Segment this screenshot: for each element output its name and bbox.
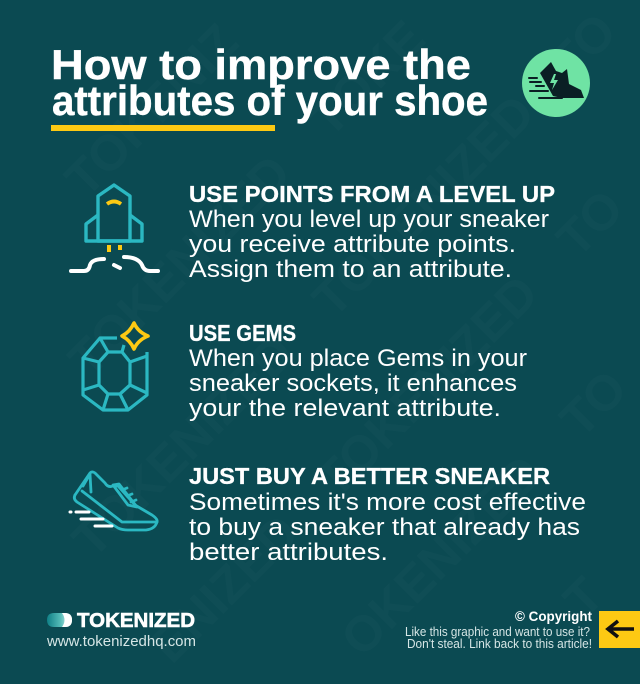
logo: tokenized: TOKENIZED — [77, 610, 195, 632]
section: use gems: USE GEMS — [189, 320, 296, 346]
infographic canvas: TOKENIZED — [62, 325, 305, 568]
icon: sneaker — [70, 472, 157, 530]
section: use gems: your the relevant attribute. — [189, 395, 501, 422]
section: just buy a better sneaker: to buy a sneaker that already has — [189, 514, 580, 541]
infographic canvas: T — [553, 567, 614, 628]
section: use points from a level up: When you level up your sneaker — [189, 206, 549, 233]
section: use points from a level up: you receive attribute points. — [189, 231, 516, 258]
infographic canvas: TOKENIZED — [58, 144, 301, 387]
section: use points from a level up — [189, 181, 555, 283]
arrow button — [599, 611, 640, 648]
infographic canvas: TOKENIZED — [305, 264, 549, 508]
copyright notice: © Copyright — [515, 608, 592, 624]
section: use gems — [189, 320, 527, 422]
infographic canvas: TO — [546, 179, 634, 267]
icon: running shoe badge — [522, 49, 590, 117]
infographic canvas: TOKENIZ — [54, 13, 249, 207]
icon: rocket — [71, 185, 158, 271]
section: use points from a level up: Assign them to an attribute. — [189, 256, 512, 283]
title — [51, 41, 488, 124]
copyright notice: Like this graphic and want to use it? — [405, 624, 590, 639]
section: use points from a level up: USE POINTS FROM A LEVEL UP — [189, 181, 555, 207]
section: just buy a better sneaker: JUST BUY A BETTER SNEAKER — [189, 463, 550, 489]
section: just buy a better sneaker — [189, 463, 586, 566]
infographic canvas: TOKE — [298, 10, 436, 147]
infographic canvas: TOKENIZED — [302, 84, 545, 327]
section: use gems: sneaker sockets, it enhances — [189, 370, 517, 397]
copyright notice: Don't steal. Link back to this article! — [407, 636, 592, 651]
title: How to improve the — [51, 41, 471, 88]
title underline — [51, 125, 275, 131]
infographic canvas: OKENIZED — [330, 445, 553, 667]
infographic canvas: ENIZED — [140, 504, 309, 673]
section: just buy a better sneaker: Sometimes it's more cost effective — [189, 489, 586, 516]
infographic canvas: TO — [549, 360, 637, 448]
title: attributes of your shoe — [52, 77, 488, 124]
section: use gems: When you place Gems in your — [189, 345, 527, 372]
section: just buy a better sneaker: better attributes. — [189, 539, 388, 566]
icon: gem with sparkle — [83, 323, 148, 410]
infographic canvas: TO — [539, 2, 627, 91]
copyright notice — [405, 608, 592, 651]
website url: www.tokenizedhq.com — [46, 633, 196, 650]
